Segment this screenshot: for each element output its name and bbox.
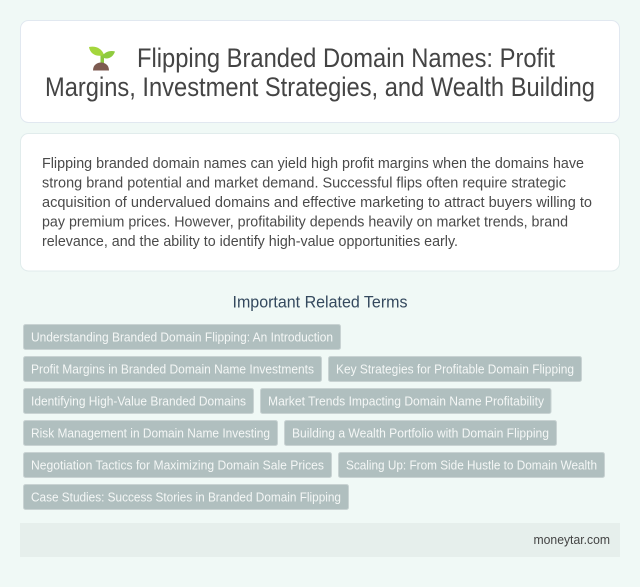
title: Flipping Branded Domain Names: Profit	[137, 43, 556, 73]
summary paragraph	[42, 155, 592, 250]
summary paragraph: pay premium prices. However, profitability depends heavily on market trends, brand	[42, 214, 568, 230]
chip: understanding	[24, 324, 340, 350]
chip: negotiation	[24, 452, 332, 478]
chip: scaling up	[338, 452, 604, 478]
footer bar	[20, 523, 620, 557]
chip: case studies	[24, 484, 348, 510]
chip: identifying: Identifying High-Value Branded Domains	[31, 394, 246, 408]
chip: profit margins: Profit Margins in Branded Domain Name Investments	[31, 362, 314, 376]
summary paragraph: Flipping branded domain names can yield high profit margins when the domains have	[42, 155, 584, 172]
panel: summary text card	[20, 134, 620, 271]
chip: wealth portfolio: Building a Wealth Portfolio with Domain Flipping	[292, 426, 549, 440]
chip: risk management	[24, 420, 278, 446]
chip: market trends	[260, 388, 551, 414]
chip: market trends: Market Trends Impacting Domain Name Profitability	[268, 394, 544, 408]
chip: key strategies	[328, 356, 582, 382]
icon: seedling	[89, 47, 115, 70]
chip: understanding: Understanding Branded Domain Flipping: An Introduction	[31, 330, 333, 344]
chip: key strategies: Key Strategies for Profitable Domain Flipping	[336, 362, 574, 376]
heading: important related terms: Important Related Terms	[232, 292, 408, 312]
panel: related term chips	[24, 324, 604, 510]
chip: case studies: Case Studies: Success Stories in Branded Domain Flipping	[31, 490, 341, 504]
chip: identifying	[24, 388, 254, 414]
summary paragraph: acquisition of undervalued domains and effective marketing to attract buyers willing to	[42, 194, 592, 211]
panel: title card	[20, 20, 620, 122]
summary paragraph: strong brand potential and market demand. Successful flips often require strategic	[42, 174, 566, 192]
chip: wealth portfolio	[284, 420, 556, 446]
chip: scaling up: Scaling Up: From Side Hustle to Domain Wealth	[346, 458, 597, 472]
chip: negotiation: Negotiation Tactics for Maximizing Domain Sale Prices	[31, 458, 324, 472]
chip: risk management: Risk Management in Domain Name Investing	[31, 426, 270, 440]
title	[45, 43, 595, 102]
footer bar: moneytar.com	[534, 532, 610, 547]
chip: profit margins	[24, 356, 322, 382]
summary paragraph: relevance, and the ability to identify high-value opportunities early.	[42, 233, 458, 250]
